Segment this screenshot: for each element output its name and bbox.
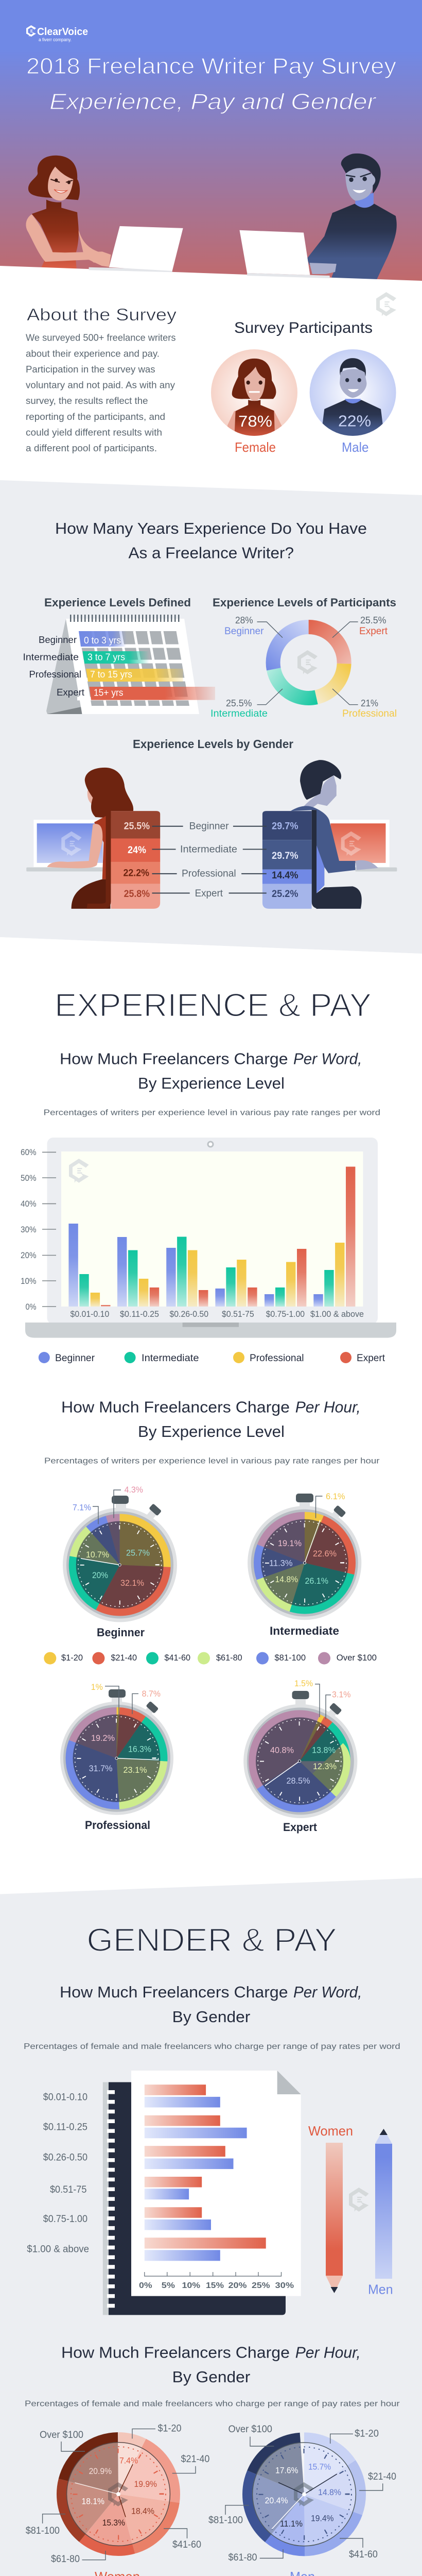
- clock chart: men: Over $100: [228, 2424, 272, 2435]
- avatar: male 22%: [310, 349, 396, 455]
- laptops in hero: [89, 226, 330, 278]
- clock chart: men: [208, 2424, 396, 2576]
- body text: We surveyed 500+ freelance writers: [26, 333, 176, 343]
- heading: per hour by experience: Per Hour,: [295, 1398, 361, 1416]
- clock chart: men: 11.1%: [280, 2519, 303, 2529]
- bar chart: pay per word by gender in notebook: [27, 2071, 393, 2315]
- label: intermediate 25.5%: Intermediate: [210, 708, 268, 719]
- avatar: male 22%: Male: [342, 439, 368, 455]
- section title: experience and pay: EXPERIENCE & PAY: [55, 988, 372, 1024]
- bar: professional: Professional: [29, 669, 81, 680]
- logo: ClearVoice header: [26, 25, 88, 43]
- pencil: women: Women: [308, 2123, 353, 2139]
- stopwatch chart: professional: 23.1%: [124, 1765, 147, 1775]
- x axis: 15%: [206, 2281, 224, 2290]
- label: expert 25.5%: 25.5%: [360, 615, 386, 625]
- clock chart: women: $1-20: [157, 2424, 181, 2434]
- stopwatch chart: intermediate: 11.3%: [269, 1558, 292, 1568]
- body text: reporting of the participants, and: [26, 412, 165, 422]
- heading: how many years experience: [55, 519, 367, 562]
- stopwatch chart: expert: Expert: [283, 1821, 318, 1834]
- clock chart: women: $61-80: [51, 2554, 80, 2565]
- level labels: Intermediate: [180, 844, 237, 855]
- legend: experience levels: Intermediate: [142, 1353, 199, 1364]
- row labels: $1.00 & above: [27, 2244, 89, 2255]
- x axis: 10%: [182, 2281, 200, 2290]
- label: beginner 28%: 28%: [235, 615, 253, 625]
- stopwatch chart: expert: [243, 1679, 357, 1834]
- stopwatch chart: expert: 40.8%: [270, 1745, 294, 1755]
- clock chart: women: 18.4%: [131, 2506, 154, 2516]
- x axis: 25%: [252, 2281, 270, 2290]
- label: professional 21%: 21%: [361, 698, 378, 708]
- row labels: $0.11-0.25: [43, 2122, 87, 2132]
- stopwatch chart: beginner: 10.7%: [86, 1550, 109, 1560]
- legend: experience levels: Professional: [250, 1353, 304, 1364]
- bars: [145, 2084, 266, 2261]
- stopwatch chart: expert: 1.5%: [294, 1679, 313, 1688]
- clock chart: men: 17.6%: [275, 2466, 298, 2476]
- clock chart: women: $21-40: [181, 2454, 209, 2465]
- section title: gender and pay: GENDER & PAY: [86, 1922, 337, 1958]
- heading: per word by experience: By Experience Level: [138, 1074, 285, 1092]
- donut chart: [273, 627, 344, 698]
- bar chart: pay per word by experience in laptop: [21, 1138, 396, 1338]
- heading: per hour by gender: Per Hour,: [295, 2343, 361, 2362]
- x axis: 30%: [275, 2281, 294, 2290]
- body text: could yield different results with: [26, 427, 162, 437]
- heading: per word by gender: [60, 1983, 362, 2026]
- heading: per word by gender: How Much Freelancers Charge: [60, 1983, 288, 2001]
- description: Percentages of writers per experience level in various pay rate ranges per word: [44, 1109, 380, 1117]
- panel: survey participants: [211, 319, 396, 455]
- heading: per word by experience: [60, 1050, 362, 1092]
- logo: ClearVoice header: ClearVoice: [37, 26, 88, 38]
- subtitle: Experience, Pay and Gender: [49, 89, 377, 114]
- bars: [68, 1166, 355, 1307]
- stopwatch chart: beginner: 20%: [92, 1570, 108, 1580]
- values: men: [272, 821, 298, 900]
- legend: hourly rates: Over $100: [337, 1653, 377, 1663]
- clock chart: women: $41-60: [172, 2539, 201, 2550]
- bar: intermediate: [23, 651, 149, 664]
- illustration: woman and man back to back: [26, 760, 397, 909]
- axis: 30%: [21, 1225, 37, 1234]
- stopwatch chart: beginner: [63, 1485, 177, 1639]
- heading: per word by experience: Per Word,: [293, 1050, 362, 1068]
- heading: how many years experience: How Many Years Experience Do You Have: [55, 519, 367, 537]
- stopwatch chart: expert: 28.5%: [286, 1776, 310, 1786]
- stopwatch chart: intermediate: [248, 1492, 361, 1637]
- stopwatch chart: professional: 31.7%: [89, 1764, 113, 1773]
- clock chart: men: 15.7%: [308, 2462, 331, 2472]
- avatar: male 22%: 22%: [338, 412, 371, 430]
- icon: calendar: [46, 618, 199, 714]
- legend: experience levels: Beginner: [55, 1353, 95, 1364]
- x axis: 5%: [162, 2281, 175, 2290]
- label: beginner 28%: Beginner: [224, 626, 264, 637]
- illustration: man at laptop: [307, 154, 397, 282]
- stopwatch chart: intermediate: 6.1%: [326, 1492, 345, 1501]
- clock chart: women: 20.9%: [89, 2466, 112, 2476]
- clock chart: men: $21-40: [368, 2471, 396, 2482]
- stopwatch chart: beginner: 32.1%: [120, 1578, 144, 1588]
- pencil: men: [368, 2129, 393, 2297]
- bar: beginner: Beginner: [39, 635, 77, 645]
- body text: survey, the results reflect the: [26, 396, 148, 406]
- legend: hourly rates: [44, 1652, 377, 1665]
- stopwatch chart: professional: 8.7%: [142, 1689, 161, 1699]
- body text: [26, 333, 176, 453]
- heading: Survey Participants: [234, 319, 373, 336]
- heading: per word by experience: How Much Freelancers Charge: [60, 1050, 288, 1068]
- label: expert 25.5%: [332, 615, 388, 638]
- row labels: $0.75-1.00: [43, 2214, 87, 2225]
- stopwatch chart: beginner: 25.7%: [126, 1548, 150, 1558]
- stopwatch chart: expert: 3.1%: [332, 1690, 351, 1699]
- logo in donut: [297, 650, 318, 674]
- values: women: 22.2%: [124, 868, 149, 879]
- heading: per word by gender: By Gender: [172, 2008, 250, 2026]
- label: professional 21%: [332, 689, 397, 719]
- legend: experience levels: [39, 1352, 385, 1364]
- clock chart: women: Over $100: [40, 2430, 83, 2441]
- stopwatch chart: professional: [60, 1682, 173, 1832]
- clock chart: women: $81-100: [26, 2526, 60, 2536]
- bar: expert: 15+ yrs: [94, 688, 124, 698]
- row labels: $0.01-0.10: [43, 2092, 87, 2103]
- clock chart: women: [26, 2424, 209, 2576]
- heading: Experience Levels by Gender: [133, 737, 293, 751]
- values: women: 24%: [128, 845, 146, 856]
- heading: About the Survey: [27, 305, 177, 324]
- stopwatch chart: expert: 13.8%: [312, 1745, 336, 1755]
- stopwatch chart: professional: 16.3%: [128, 1744, 151, 1754]
- label: expert 25.5%: Expert: [359, 626, 388, 637]
- bar: expert: [57, 687, 215, 700]
- values: women: [124, 821, 150, 900]
- bar: beginner: [39, 631, 127, 647]
- label: intermediate 25.5%: 25.5%: [226, 698, 252, 708]
- stopwatch chart: intermediate: 22.6%: [313, 1549, 337, 1558]
- label: intermediate 25.5%: [210, 689, 283, 719]
- heading: how many years experience: As a Freelance Writer?: [129, 544, 294, 562]
- logo watermark: [349, 2188, 368, 2212]
- heading: per hour by experience: How Much Freelancers Charge: [61, 1398, 290, 1416]
- values: men: 29.7%: [272, 851, 298, 861]
- clock chart: women: 15.3%: [102, 2518, 125, 2528]
- heading: per hour by experience: By Experience Level: [138, 1422, 285, 1440]
- stopwatch chart: intermediate: Intermediate: [270, 1624, 339, 1637]
- values: men: 14.4%: [272, 870, 298, 881]
- legend: hourly rates: $41-60: [165, 1653, 190, 1663]
- label: professional 21%: Professional: [342, 708, 397, 719]
- axis: 10%: [21, 1276, 37, 1286]
- heading: per word by gender: Per Word,: [293, 1983, 362, 2001]
- illustration: woman at laptop: [26, 156, 111, 271]
- row labels: $0.51-75: [50, 2184, 86, 2195]
- stopwatch chart: beginner: 4.3%: [125, 1485, 143, 1495]
- level labels: [180, 821, 237, 899]
- x labels: $0.51-75: [222, 1309, 254, 1319]
- body text: about their experience and pay.: [26, 348, 160, 359]
- avatar: female 78%: Female: [235, 439, 276, 455]
- level labels: Expert: [195, 888, 223, 899]
- avatar: female 78%: 78%: [238, 412, 272, 430]
- clock chart: men: 19.4%: [311, 2514, 333, 2523]
- bar: professional: [29, 669, 183, 682]
- values: men: 29.7%: [272, 821, 298, 832]
- x labels: $0.11-0.25: [120, 1309, 159, 1319]
- clock chart: women: 18.1%: [81, 2497, 104, 2506]
- axis: 20%: [21, 1250, 37, 1260]
- heading: Experience Levels of Participants: [213, 596, 396, 609]
- x labels: [70, 1309, 364, 1319]
- clock chart: men: $61-80: [228, 2552, 257, 2563]
- heading: per hour by gender: [61, 2343, 361, 2386]
- logo watermark: [376, 292, 396, 316]
- values: women: 25.8%: [124, 889, 150, 900]
- values: women: 25.5%: [124, 821, 150, 832]
- level labels: Beginner: [189, 821, 229, 832]
- hero panel: [0, 0, 422, 289]
- avatar: female 78%: [211, 349, 297, 455]
- stopwatch chart: professional: 1%: [91, 1682, 103, 1692]
- panel: experience levels of participants: [210, 596, 397, 719]
- body text: a different pool of participants.: [26, 443, 157, 453]
- legend: experience levels: Expert: [357, 1353, 385, 1364]
- x axis: [139, 2272, 294, 2290]
- stopwatch chart: expert: 12.3%: [313, 1761, 337, 1771]
- x labels: $0.26-0.50: [170, 1309, 208, 1319]
- axis: 50%: [21, 1173, 37, 1183]
- values: men: 25.2%: [272, 889, 298, 900]
- level labels: Professional: [182, 868, 236, 879]
- axis: [21, 1147, 56, 1312]
- legend: hourly rates: $21-40: [111, 1653, 137, 1663]
- description: Percentages of writers per experience level in various pay rate ranges per hour: [44, 1457, 380, 1466]
- pencil: men: Men: [368, 2282, 393, 2297]
- axis: 60%: [21, 1147, 37, 1157]
- axis: 40%: [21, 1199, 37, 1209]
- x labels: $0.75-1.00: [266, 1309, 305, 1319]
- x axis: 0%: [139, 2281, 152, 2290]
- clock chart: men: $81-100: [208, 2515, 243, 2526]
- bar: beginner: 0 to 3 yrs: [84, 635, 121, 646]
- clock chart: men: 14.8%: [318, 2487, 341, 2497]
- legend: hourly rates: $81-100: [275, 1653, 306, 1663]
- pencil: women: [308, 2123, 353, 2293]
- x labels: $1.00 & above: [310, 1309, 364, 1319]
- stopwatch chart: intermediate: 14.8%: [275, 1574, 298, 1584]
- stopwatch chart: professional: 19.2%: [91, 1733, 115, 1743]
- stopwatch chart: professional: Professional: [85, 1819, 150, 1832]
- heading: per hour by experience: [61, 1398, 361, 1440]
- clock chart: men: $41-60: [349, 2549, 378, 2560]
- logo: ClearVoice header: a fiverr company.: [39, 37, 72, 43]
- body text: voluntary and not paid. As with any: [26, 380, 175, 391]
- legend: hourly rates: $61-80: [216, 1653, 242, 1663]
- clock chart: women: 19.9%: [134, 2479, 157, 2489]
- label: beginner 28%: [224, 615, 283, 638]
- row labels: [27, 2092, 89, 2255]
- stopwatch chart: beginner: 7.1%: [73, 1502, 91, 1513]
- heading: Experience Levels Defined: [44, 596, 191, 609]
- x axis: 20%: [228, 2281, 247, 2290]
- description: Percentages of female and male freelancers who charge per range of pay rates per word: [24, 2042, 400, 2051]
- row labels: $0.26-0.50: [43, 2153, 87, 2163]
- panel: experience levels defined: [23, 596, 215, 714]
- title: 2018 Freelance Writer Pay Survey: [26, 54, 396, 79]
- panel: about the survey: [26, 292, 396, 453]
- clock chart: men: 20.4%: [265, 2496, 288, 2505]
- body text: Participation in the survey was: [26, 364, 155, 375]
- panel: experience levels by gender: [26, 737, 397, 909]
- stopwatch chart: beginner: Beginner: [97, 1626, 145, 1639]
- bar: intermediate: Intermediate: [23, 652, 79, 663]
- notebook: [103, 2071, 301, 2315]
- stopwatch chart: intermediate: 19.1%: [278, 1538, 302, 1548]
- axis: 0%: [26, 1302, 36, 1312]
- heading: per hour by gender: By Gender: [172, 2368, 250, 2386]
- bar: intermediate: 3 to 7 yrs: [87, 652, 125, 663]
- laptop: [25, 1138, 396, 1338]
- heading: per hour by gender: How Much Freelancers Charge: [61, 2343, 290, 2362]
- stopwatch chart: intermediate: 26.1%: [305, 1576, 328, 1586]
- legend: hourly rates: $1-20: [61, 1653, 83, 1663]
- description: Percentages of female and male freelancers who charge per range of pay rates per hour: [25, 2400, 400, 2408]
- clock chart: men: $1-20: [355, 2429, 379, 2439]
- clock chart: women: 7.4%: [119, 2456, 138, 2466]
- bar: professional: 7 to 15 yrs: [90, 669, 132, 680]
- x labels: $0.01-0.10: [70, 1309, 109, 1319]
- bar: expert: Expert: [57, 687, 84, 698]
